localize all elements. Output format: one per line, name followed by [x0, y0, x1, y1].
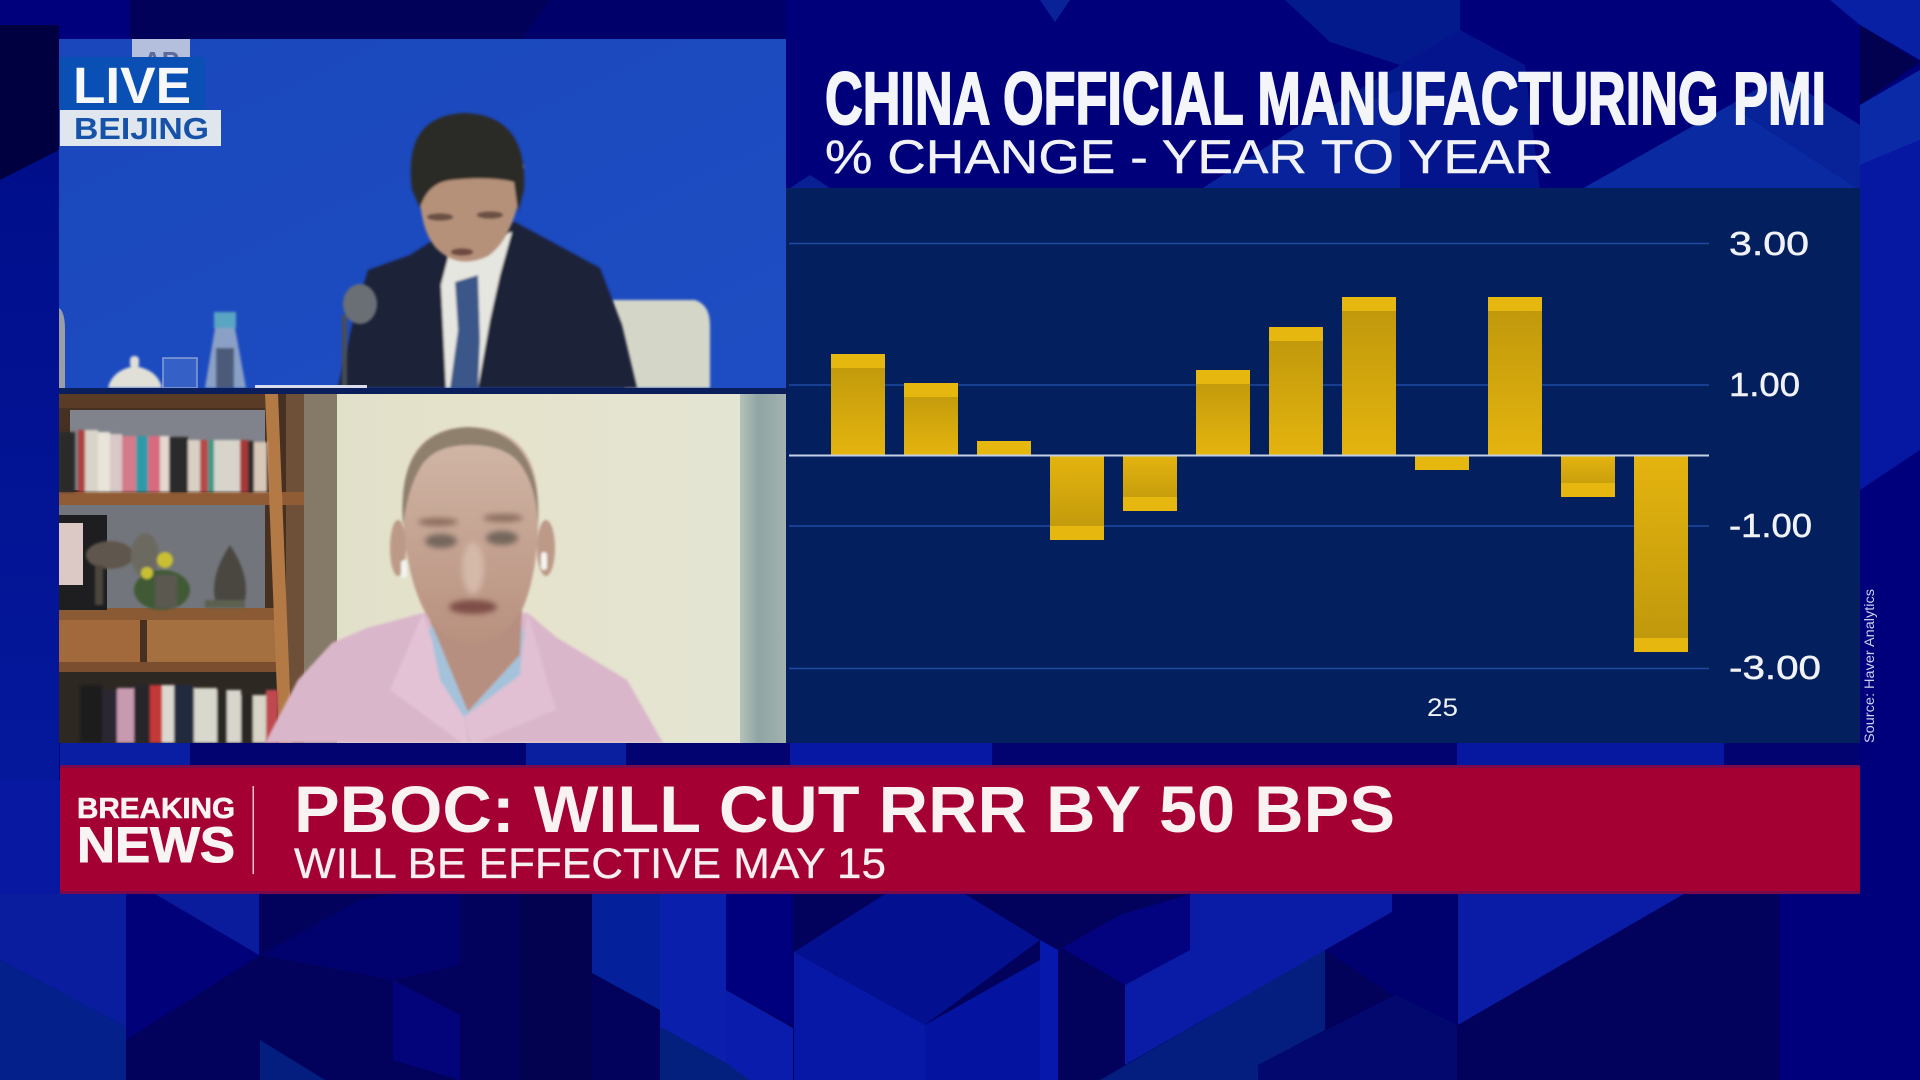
divider strip between videos	[59, 388, 786, 394]
x axis label: 25	[1427, 694, 1458, 722]
live badge	[59, 57, 221, 146]
sub headline: WILL BE EFFECTIVE MAY 15	[294, 840, 886, 888]
y axis labels: -1.00	[1729, 507, 1812, 544]
headline: PBOC: WILL CUT RRR BY 50 BPS	[294, 772, 1395, 846]
glass cup	[163, 358, 197, 388]
y axis labels	[1729, 225, 1821, 686]
statues and orchid	[86, 533, 246, 610]
panel: bottom video, guest in home office	[59, 394, 786, 743]
teapot	[108, 356, 162, 388]
speaker head and hair	[411, 113, 524, 261]
zero line	[789, 454, 1709, 456]
breaking news ticker	[60, 765, 1860, 894]
water bottle	[205, 312, 246, 388]
y axis labels: 1.00	[1729, 366, 1800, 403]
panel: top video, speaker at press conference	[59, 39, 786, 388]
cropped network bug: AP	[143, 46, 179, 76]
chair edge at left	[59, 308, 65, 388]
speaker facial features	[427, 212, 503, 256]
microphone	[342, 284, 377, 388]
speaker suit and shirt	[338, 222, 637, 388]
chair behind speaker	[612, 300, 710, 388]
y axis labels: -3.00	[1729, 649, 1821, 686]
picture frame	[59, 515, 107, 610]
bookcase	[59, 394, 304, 743]
live badge: LIVE	[73, 57, 191, 114]
lower row of books	[80, 685, 278, 743]
chart subtitle: % CHANGE - YEAR TO YEAR	[825, 130, 1553, 183]
curtain	[740, 394, 786, 743]
cropped network bug	[132, 39, 190, 57]
bar chart panel	[786, 188, 1860, 743]
breaking news label: NEWS	[77, 817, 235, 873]
breaking news label: BREAKING	[77, 793, 235, 825]
bars	[831, 297, 1688, 652]
guest head	[390, 427, 555, 645]
panel strip beside bookcase	[303, 394, 337, 743]
y axis labels: 3.00	[1729, 225, 1809, 262]
strip between panels and ticker	[60, 743, 1860, 765]
breaking news label	[77, 793, 235, 873]
grid lines	[789, 244, 1709, 668]
live badge: BEIJING	[74, 111, 209, 146]
paper on desk	[255, 385, 367, 388]
upper row of books	[59, 430, 267, 492]
guest pink shirt	[265, 610, 663, 743]
source note: Source: Haver Analytics	[1861, 589, 1877, 743]
